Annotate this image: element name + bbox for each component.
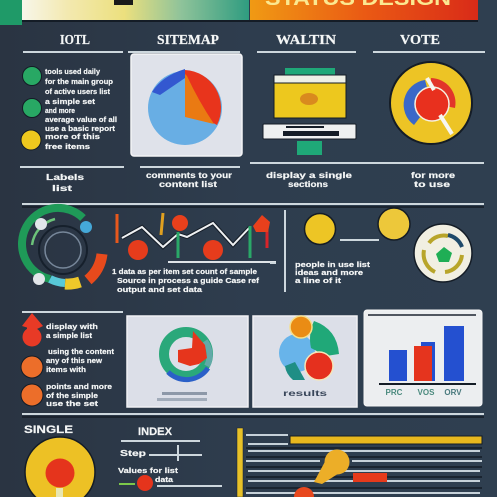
caption: vote	[411, 171, 456, 189]
text block: tool notes	[45, 67, 117, 151]
text block: alert notes: using the content	[48, 347, 115, 356]
label: slider three: data	[155, 477, 173, 484]
caption: main	[266, 171, 353, 189]
text block: chart notes	[112, 267, 260, 294]
text block: alert notes: items with	[46, 365, 87, 374]
icon: red arrow badge	[22, 313, 43, 346]
caption: vote: to use	[414, 180, 451, 189]
text block: coin notes: ideas and more	[295, 268, 363, 277]
axis labels: ORV	[444, 388, 462, 397]
icon: coin left	[304, 214, 336, 244]
panel: vote	[373, 33, 485, 189]
panel: sitemap	[128, 33, 242, 189]
label: slider three	[118, 466, 179, 484]
text block: coin notes: people in use list	[295, 260, 371, 269]
banner: title strip	[0, 0, 478, 25]
panel: timeline	[237, 428, 482, 497]
text block: alert notes: display with	[46, 322, 99, 331]
icon: target coin	[390, 62, 472, 144]
bar: red	[353, 473, 387, 482]
panel: main	[250, 33, 484, 189]
card: bar chart	[364, 310, 482, 406]
panel: sliders	[118, 426, 222, 491]
text block: chart notes: 1 data as per item set count of sample	[112, 267, 257, 276]
icon: green dot one	[22, 66, 42, 86]
text block: tool notes: more of this	[45, 132, 100, 141]
icon: orange dot two	[21, 384, 43, 406]
card: pie chart	[131, 54, 242, 156]
chart: ring gauge	[22, 208, 102, 285]
text block: tool notes: and more	[45, 106, 75, 115]
icon: orange pin	[314, 450, 350, 484]
text block: alert notes	[46, 322, 115, 408]
text block: alert notes: of the simple	[46, 391, 98, 400]
caption: sitemap	[146, 171, 232, 189]
text block: coin notes	[295, 260, 371, 285]
text block: chart notes: Source in process a guide Case ref	[117, 276, 260, 285]
panel: ring and line chart	[22, 208, 276, 294]
icon: coin right	[378, 208, 410, 240]
heading: sitemap: SITEMAP	[157, 33, 219, 48]
panel: single gauge	[24, 424, 95, 497]
caption: bubble cluster: results	[283, 389, 328, 398]
heading: tool: IOTL	[60, 33, 90, 48]
axis labels: PRC	[386, 388, 403, 397]
heading: single: SINGLE	[24, 424, 73, 436]
card: bubble cluster	[253, 316, 357, 407]
icon: gauge circle	[25, 437, 95, 497]
icon: orange dot one	[21, 356, 43, 378]
icon: recycle badge	[414, 224, 472, 282]
icon: slider knob	[137, 475, 153, 491]
text block: tool notes: use a basic report	[45, 124, 116, 133]
axis labels	[386, 388, 462, 397]
text block: tool notes: free items	[45, 142, 90, 151]
text block: chart notes: output and set data	[117, 285, 203, 294]
caption: sitemap: content list	[159, 180, 218, 189]
card: donut chart	[127, 316, 248, 407]
text block: alert notes: a simple list	[46, 331, 93, 340]
heading: vote: VOTE	[400, 33, 440, 48]
label: slider three: Values for list	[118, 466, 179, 475]
icon: yellow dot	[21, 130, 41, 150]
panel: tool column	[20, 33, 124, 193]
text block: tool notes: a simple set	[45, 97, 96, 106]
text block: tool notes: tools used daily	[45, 67, 101, 76]
label: slider two: Step	[120, 449, 146, 458]
text block: alert notes: points and more	[46, 382, 112, 391]
text block: alert notes: any of this new	[46, 356, 102, 365]
caption: main: display a single	[266, 171, 353, 180]
caption: main: sections	[288, 180, 329, 189]
caption: tool: Labels	[46, 173, 85, 182]
text block: tool notes: average value of all	[45, 115, 117, 124]
caption: tool: list	[52, 184, 73, 193]
caption: vote: for more	[411, 171, 456, 180]
text block: tool notes: of active users list	[45, 87, 111, 96]
icon: green dot two	[22, 98, 42, 118]
chart: line chart with pins	[117, 213, 276, 262]
heading: main: WALTIN	[276, 33, 336, 48]
text block: tool notes: for the main group	[45, 77, 113, 86]
icon: monitor	[263, 68, 356, 155]
panel: coins and badge	[270, 208, 472, 292]
caption: tool	[46, 173, 85, 193]
axis labels: VOS	[418, 388, 435, 397]
icon: red marker	[294, 487, 314, 497]
caption: sitemap: comments to your	[146, 171, 232, 180]
text block: alert notes: use the set	[46, 399, 99, 408]
heading: sliders: INDEX	[138, 426, 173, 438]
bar: yellow	[290, 436, 482, 444]
panel: alert list	[21, 313, 115, 408]
text block: coin notes: a line of it	[295, 276, 342, 285]
axis: yellow vertical	[237, 428, 243, 497]
